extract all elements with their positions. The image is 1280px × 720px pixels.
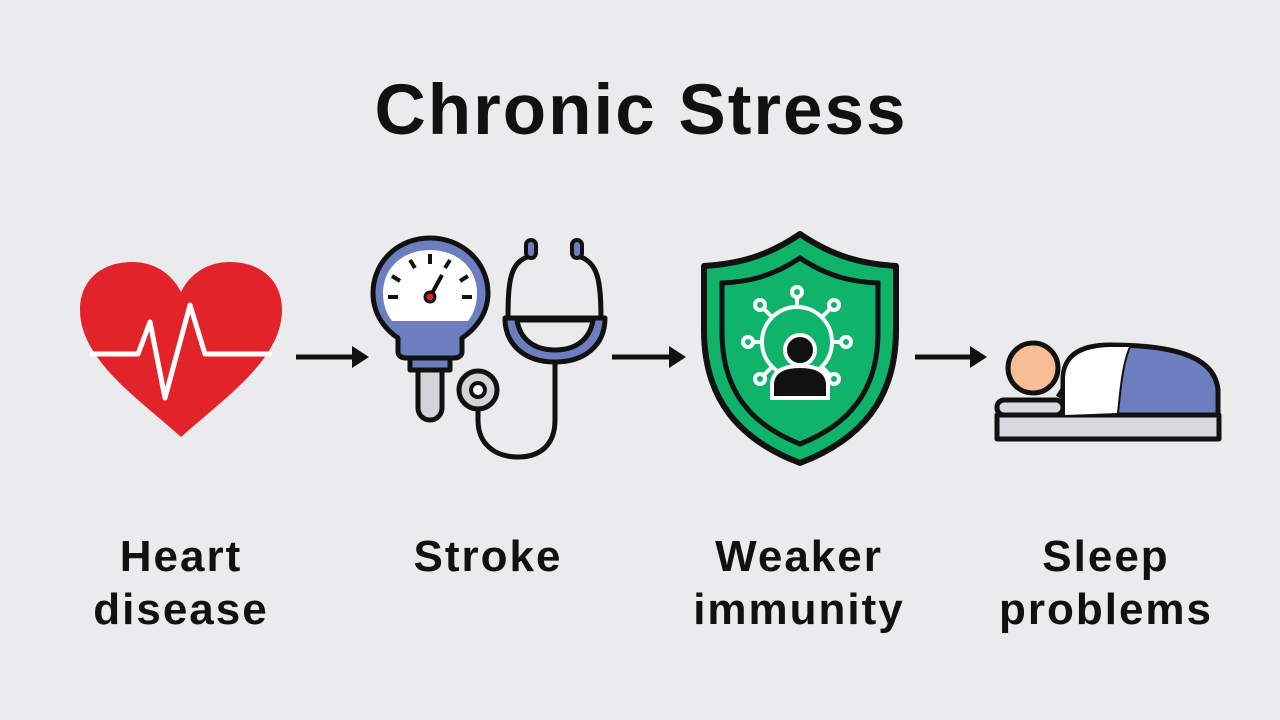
title: Chronic Stress [374, 71, 908, 150]
label: sleep problems: problems [999, 585, 1213, 634]
arrow 2 [612, 346, 686, 368]
icon: person sleeping in bed [997, 343, 1219, 439]
icon: shield with virus and person [704, 234, 896, 463]
label: weaker immunity: Weaker [715, 532, 883, 581]
arrow 1 [296, 346, 369, 368]
label: heart disease: Heart [120, 532, 242, 581]
label: stroke: Stroke [414, 532, 562, 581]
icon: heart with pulse [80, 262, 282, 437]
label: sleep problems [999, 532, 1213, 634]
label: heart disease [93, 532, 269, 634]
label: heart disease: disease [93, 585, 269, 634]
label: weaker immunity: immunity [693, 585, 905, 634]
label: weaker immunity [693, 532, 905, 634]
icon: blood pressure gauge and stethoscope [373, 238, 605, 457]
arrow 3 [915, 346, 987, 368]
label: sleep problems: Sleep [1042, 532, 1170, 581]
